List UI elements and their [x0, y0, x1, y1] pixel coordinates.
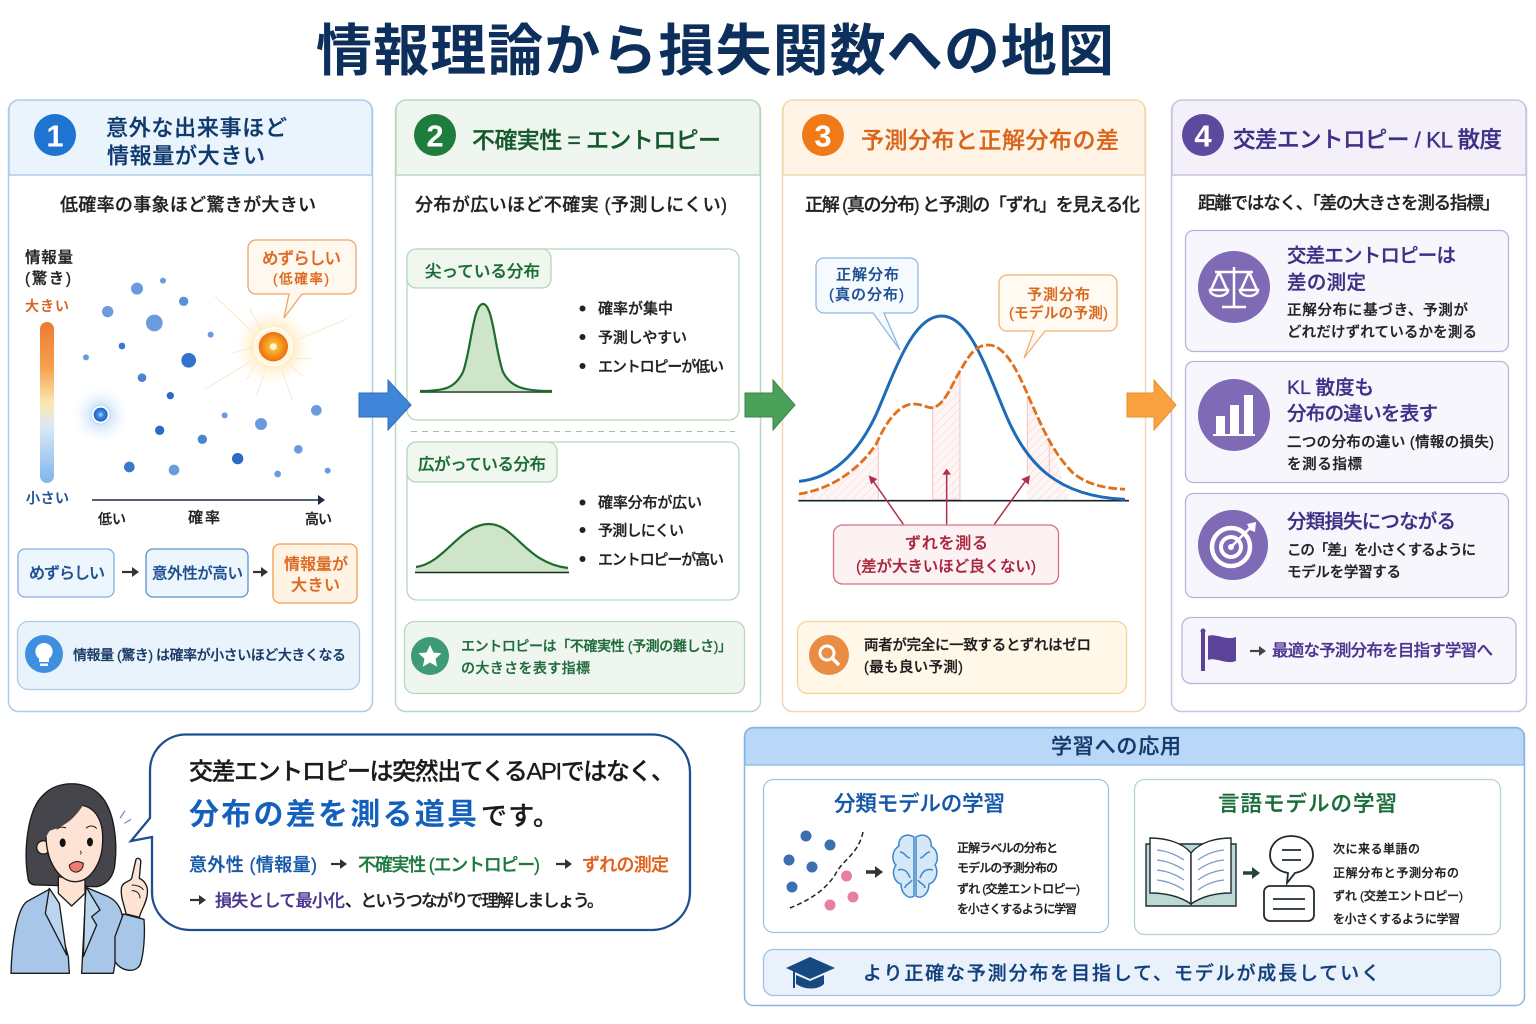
card: classification model: ずれ (交差エントロピー) [957, 882, 1080, 896]
scatter chart: probability vs surprise: 確率 [188, 510, 220, 526]
note: zero difference: 両者が完全に一致するとずれはゼロ [864, 636, 1091, 654]
callout: measure the gap [834, 525, 1058, 584]
banner: model growth: より正確な予測分布を目指して、モデルが成長していく [863, 962, 1380, 984]
badge 3: 3 [814, 118, 832, 154]
card: classification loss: モデルを学習する [1287, 563, 1401, 581]
card: language model: 言語モデルの学習 [1218, 791, 1397, 816]
scatter chart: probability vs surprise: 高い [305, 511, 332, 527]
chart: wide curve [415, 524, 569, 572]
speech bubble: ずれの測定 [582, 855, 669, 875]
note: entropy meaning: エントロピーは「不確実性 (予測の難しさ)」 [461, 638, 732, 654]
panel 2: entropy [396, 100, 760, 712]
note: information insight [18, 622, 360, 690]
icon: light bulb [25, 635, 63, 673]
card: KL divergence: KL 散度も [1287, 377, 1374, 399]
card: language model [1134, 780, 1500, 934]
heading 3: 予測分布と正解分布の差 [861, 127, 1119, 153]
callout: rare event: (低確率) [273, 272, 329, 286]
icon: graduation cap [786, 957, 835, 988]
sub-panel: wide distribution: エントロピーが高い [598, 550, 724, 568]
heading 4: 交差エントロピー / KL 散度 [1233, 128, 1502, 152]
callout: measure the gap: ずれを測る [905, 534, 988, 552]
speech bubble: です。 [481, 801, 559, 831]
speech bubble: 分布の差を測る道具 [189, 798, 477, 832]
panel 1: information content [8, 100, 372, 712]
flow: rare to high information [18, 544, 357, 603]
callout: true distribution: 正解分布 [836, 266, 899, 284]
card: classification model: 正解ラベルの分布と [957, 840, 1058, 855]
card: KL divergence: 二つの分布の違い (情報の損失) [1287, 434, 1494, 451]
callout: predicted distribution: 予測分布 [1027, 286, 1090, 304]
flow: rare to high information: 意外性が高い [152, 564, 243, 582]
icon: bar chart [1198, 379, 1270, 451]
sub-panel: wide distribution [407, 442, 739, 600]
card: language model: 次に来る単語の [1333, 841, 1420, 856]
panel 4: cross entropy / KL [1172, 100, 1526, 712]
badge 4 [1182, 114, 1224, 156]
goal banner [1182, 618, 1516, 684]
callout: rare event [248, 240, 356, 318]
card: measure difference [1186, 230, 1508, 352]
heading 1 [106, 116, 287, 168]
card: measure difference: どれだけずれているかを測る [1287, 324, 1477, 341]
subtitle 1: 低確率の事象ほど驚きが大きい [60, 194, 316, 215]
sub-panel: peaked distribution: 尖っている分布 [425, 262, 540, 281]
sub-panel: peaked distribution: 予測しやすい [598, 330, 687, 346]
speech bubble [131, 734, 690, 930]
callout: true distribution: (真の分布) [829, 286, 904, 304]
card: measure difference: 正解分布に基づき、予測が [1287, 301, 1468, 319]
note: zero difference [798, 622, 1126, 694]
arrow: panel 3 to 4 [1127, 380, 1176, 430]
subtitle 2: 分布が広いほど不確実 (予測しにくい) [415, 194, 727, 215]
callout: predicted distribution [999, 275, 1117, 358]
arrow: panel 1 to 2 [359, 380, 411, 430]
scatter chart: probability vs surprise: 大きい [25, 298, 69, 314]
badge 1: 1 [46, 118, 64, 154]
sub-panel: peaked distribution [407, 249, 739, 420]
icon: magnifier [809, 635, 849, 675]
banner: model growth [764, 950, 1500, 996]
sub-panel: peaked distribution: 確率が集中 [598, 300, 673, 318]
icon: open book [1146, 838, 1236, 906]
note: information insight: 情報量 (驚き) は確率が小さいほど大きくなる [73, 647, 346, 663]
icon: target [1198, 510, 1268, 580]
scatter chart: probability vs surprise: 低い [98, 511, 126, 527]
card: classification model: モデルの予測分布の [957, 860, 1058, 875]
icon: brain [893, 835, 937, 897]
arrow: panel 2 to 3 [745, 380, 795, 430]
badge 4: 4 [1194, 118, 1212, 154]
icon: chat bubbles [1264, 836, 1314, 921]
note: zero difference: (最も良い予測) [864, 659, 963, 676]
scatter chart: probability vs surprise [25, 248, 347, 527]
heading 1: 意外な出来事ほど [106, 116, 287, 140]
card: language model: ずれ (交差エントロピー) [1333, 889, 1463, 903]
badge 1 [34, 114, 76, 156]
card: classification loss: この「差」を小さくするように [1287, 542, 1476, 559]
speech bubble: 不確実性 (エントロピー) [358, 855, 540, 875]
badge 3 [802, 114, 844, 156]
badge 2: 2 [426, 118, 444, 154]
card: classification model: 分類モデルの学習 [834, 791, 1005, 816]
scatter chart: probability vs surprise: 小さい [26, 490, 69, 506]
speech bubble: 、というつながりで理解しましょう。 [345, 890, 604, 910]
chart: true vs predicted distribution [798, 316, 1129, 524]
callout: predicted distribution: (モデルの予測) [1009, 304, 1108, 322]
flow: rare to high information: めずらしい [29, 564, 105, 582]
heading 1: 情報量が大きい [107, 144, 265, 168]
sub-panel: wide distribution: 確率分布が広い [598, 494, 702, 512]
card: KL divergence: を測る指標 [1287, 456, 1362, 473]
sub-panel: wide distribution: 予測しにくい [598, 522, 684, 540]
goal banner: 最適な予測分布を目指す学習へ [1272, 641, 1493, 660]
card: classification loss: 分類損失につながる [1287, 511, 1456, 533]
note: entropy meaning [404, 622, 744, 694]
card: measure difference: 差の測定 [1287, 272, 1366, 294]
icon: star [411, 637, 449, 675]
card: classification model [764, 780, 1108, 932]
icon: flag [1200, 628, 1236, 671]
icon: classification scatter [784, 830, 863, 910]
speech bubble: 交差エントロピーは突然出てくるAPIではなく、 [189, 758, 675, 786]
callout: rare event: めずらしい [262, 249, 341, 268]
card: measure difference: 交差エントロピーは [1287, 245, 1456, 267]
icon: scales [1198, 251, 1270, 323]
subtitle 3: 正解 (真の分布) と予測の「ずれ」を見える化 [805, 195, 1140, 215]
flow: rare to high information: 情報量が [284, 554, 348, 574]
card: classification model: を小さくするように学習 [957, 901, 1077, 916]
sub-panel: wide distribution: 広がっている分布 [418, 454, 546, 474]
title: 情報理論から損失関数への地図 [316, 20, 1114, 82]
panel: applications to learning [744, 728, 1524, 1006]
card: KL divergence: 分布の違いを表す [1287, 403, 1438, 425]
heading: applications: 学習への応用 [1051, 736, 1181, 758]
character: presenter pointing up [11, 784, 147, 973]
card: language model: を小さくするように学習 [1333, 911, 1460, 926]
scatter chart: probability vs surprise: (驚き) [25, 270, 71, 288]
speech bubble: 損失として最小化 [215, 892, 345, 910]
card: KL divergence [1186, 362, 1508, 482]
subtitle 4: 距離ではなく、「差の大きさを測る指標」 [1198, 193, 1500, 213]
flow: rare to high information: 大きい [291, 576, 340, 594]
scatter chart: probability vs surprise: 情報量 [25, 248, 73, 266]
sub-panel: peaked distribution: エントロピーが低い [598, 358, 724, 376]
card: classification loss [1186, 494, 1508, 598]
panel 3: prediction vs truth [782, 100, 1146, 712]
chart: peaked curve [420, 304, 552, 392]
card: language model: 正解分布と予測分布の [1333, 865, 1459, 880]
callout: measure the gap: (差が大きいほど良くない) [856, 556, 1036, 576]
badge 2 [414, 114, 456, 156]
callout: true distribution [816, 258, 918, 350]
heading 2: 不確実性 = エントロピー [472, 127, 721, 153]
note: entropy meaning: の大きさを表す指標 [461, 660, 590, 676]
speech bubble: 意外性 (情報量) [189, 855, 317, 875]
